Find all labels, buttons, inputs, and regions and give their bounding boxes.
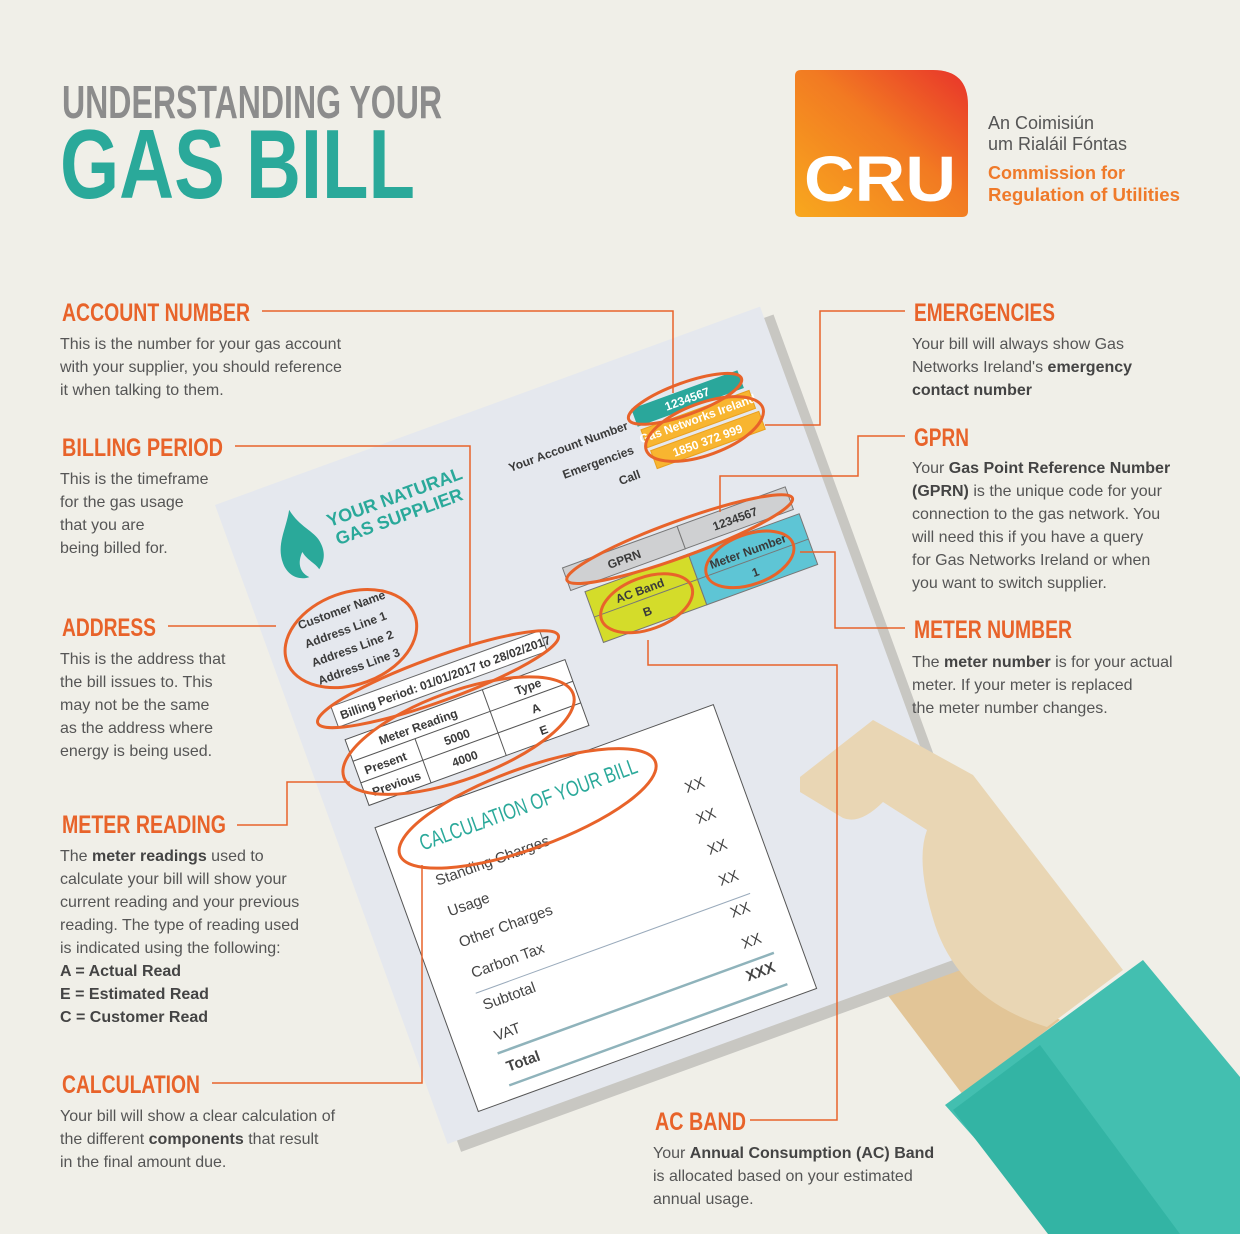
panel: GPRN: GPRN	[914, 424, 969, 452]
panel: AC band: is allocated based on your estimated	[653, 1168, 913, 1185]
logo: CRU: An Coimisiún	[988, 113, 1094, 133]
panel: address: energy is being used.	[60, 743, 212, 760]
panel: billing period: BILLING PERIOD	[62, 434, 223, 462]
connectors	[168, 311, 905, 1120]
panel: GPRN: for Gas Networks Ireland or when	[912, 552, 1150, 569]
panel: calculation: Your bill will show a clear calculation of	[60, 1108, 336, 1125]
panel: billing period: This is the timeframe	[60, 471, 209, 488]
panel: address: as the address where	[60, 720, 213, 737]
panel: calculation: CALCULATION	[62, 1071, 200, 1099]
calculation box: VAT	[492, 1020, 523, 1045]
meter reading table: Previous	[370, 768, 423, 799]
calculation box: XX	[739, 930, 764, 953]
calculation box: XXX	[744, 959, 778, 985]
meter reading table	[329, 651, 592, 819]
logo: CRU: CRU	[804, 143, 956, 215]
sleeve	[945, 960, 1240, 1234]
panel: address	[60, 614, 226, 760]
panel: meter number: The meter number is for your actual	[912, 654, 1173, 671]
title: UNDERSTANDING YOUR	[62, 76, 442, 128]
account & emergencies block: 1234567	[663, 384, 712, 414]
title: GAS BILL	[60, 109, 415, 219]
billing period box	[310, 615, 566, 744]
meter reading table: Present	[363, 749, 409, 777]
panel: GPRN: connection to the gas network. You	[912, 506, 1160, 523]
panel: address: may not be the same	[60, 697, 210, 714]
panel: meter number: METER NUMBER	[914, 616, 1072, 644]
panel: meter reading: C = Customer Read	[60, 1009, 208, 1026]
account & emergencies block: Your Account Number	[507, 418, 630, 475]
panel: account number	[59, 299, 342, 399]
calculation box: XX	[728, 899, 753, 922]
customer address: Address Line 2	[310, 627, 396, 670]
panel: meter reading: current reading and your previous	[60, 894, 299, 911]
customer address: Customer Name	[296, 588, 388, 632]
panel: billing period	[60, 434, 223, 557]
panel: billing period: for the gas usage	[60, 494, 184, 511]
panel: GPRN: you want to switch supplier.	[912, 575, 1107, 592]
hand: palm and thumb	[800, 720, 1123, 1027]
calculation box: Carbon Tax	[469, 940, 547, 982]
calculation box: Standing Charges	[433, 833, 552, 890]
panel: AC band	[653, 1108, 934, 1208]
calculation box: Other Charges	[457, 902, 555, 951]
account & emergencies block: Call	[617, 467, 642, 488]
meter reading table: A	[529, 700, 543, 717]
panel: GPRN	[911, 424, 1170, 592]
panel: address: ADDRESS	[62, 614, 156, 642]
panel: meter reading: A = Actual Read	[60, 963, 181, 980]
panel: GPRN: will need this if you have a query	[911, 529, 1143, 546]
GPRN / AC band / meter number block: 1234567	[711, 504, 760, 534]
meter reading table: Type	[513, 676, 544, 698]
panel: address: This is the address that	[60, 651, 226, 668]
account & emergencies block: Gas Networks Ireland	[638, 391, 758, 446]
billing period box: Billing Period: 01/01/2017 to 28/02/2017	[338, 633, 553, 722]
logo: CRU	[795, 70, 1180, 217]
bill paper	[215, 303, 1006, 1155]
supplier name: YOUR NATURAL	[324, 463, 465, 531]
panel: meter reading: is indicated using the following:	[60, 940, 281, 957]
title	[60, 76, 442, 219]
account & emergencies block	[502, 360, 772, 522]
meter reading table: Meter Reading	[377, 706, 459, 748]
panel: GPRN: (GPRN) is the unique code for your	[912, 483, 1162, 500]
panel: GPRN: Your Gas Point Reference Number	[912, 460, 1170, 477]
meter reading table: 4000	[450, 748, 480, 770]
panel: AC band: annual usage.	[653, 1191, 754, 1208]
panel: emergencies: Your bill will always show Gas	[912, 336, 1124, 353]
calculation box: XX	[705, 836, 730, 859]
hand wrist (under paper)	[880, 962, 1060, 1095]
panel: AC band: AC BAND	[655, 1108, 746, 1136]
panel: calculation: the different components that result	[60, 1131, 318, 1148]
account & emergencies block: 1850 372 999	[671, 421, 745, 460]
panel: meter reading: The meter readings used to	[60, 848, 264, 865]
panel: account number: with your supplier, you should reference	[59, 359, 342, 376]
GPRN / AC band / meter number block: AC Band	[614, 576, 666, 606]
panel: meter reading: METER READING	[62, 811, 226, 839]
logo: CRU: Commission for	[988, 163, 1125, 183]
calculation box: XX	[694, 805, 718, 828]
meter reading table: E	[538, 722, 550, 738]
panel: meter reading: E = Estimated Read	[60, 986, 209, 1003]
panel: emergencies: EMERGENCIES	[914, 299, 1055, 327]
panel: meter reading: calculate your bill will show your	[60, 871, 287, 888]
panel: meter number	[912, 616, 1173, 717]
meter reading table: 5000	[442, 726, 472, 748]
GPRN / AC band / meter number block: B	[641, 603, 654, 620]
panel: meter number: the meter number changes.	[912, 700, 1108, 717]
panel: account number: ACCOUNT NUMBER	[62, 299, 250, 327]
customer address: Address Line 1	[303, 608, 389, 651]
panel: emergencies	[912, 299, 1132, 399]
panel: meter reading	[60, 811, 299, 1026]
panel: meter number: meter. If your meter is replaced	[912, 677, 1133, 694]
supplier name: GAS SUPPLIER	[333, 484, 466, 549]
logo: CRU: Regulation of Utilities	[988, 185, 1180, 205]
calculation box: Total	[504, 1048, 543, 1076]
GPRN / AC band / meter number block	[561, 481, 819, 651]
customer address	[271, 572, 431, 705]
customer address: Address Line 3	[316, 645, 402, 688]
calculation box: Subtotal	[481, 979, 538, 1014]
panel: emergencies: Networks Ireland's emergency	[912, 359, 1132, 376]
panel: account number: This is the number for your gas account	[60, 336, 342, 353]
panel: AC band: Your Annual Consumption (AC) Band	[653, 1145, 934, 1162]
panel: address: the bill issues to. This	[60, 674, 213, 691]
GPRN / AC band / meter number block: 1	[750, 564, 761, 580]
panel: account number: it when talking to them.	[60, 382, 224, 399]
calculation box	[373, 699, 817, 1112]
GPRN / AC band / meter number block: GPRN	[606, 547, 643, 572]
panel: billing period: that you are	[60, 517, 145, 534]
panel: meter reading: reading. The type of reading used	[60, 917, 299, 934]
logo: CRU: um Rialáil Fóntas	[988, 134, 1127, 154]
panel: emergencies: contact number	[912, 382, 1032, 399]
panel: billing period: being billed for.	[60, 540, 168, 557]
panel: calculation: in the final amount due.	[60, 1154, 226, 1171]
account & emergencies block: Emergencies	[561, 443, 636, 482]
calculation box: XX	[682, 774, 707, 797]
GPRN / AC band / meter number block: Meter Number	[708, 531, 789, 572]
calculation box: CALCULATION OF YOUR BILL	[416, 753, 641, 855]
icon: flame	[267, 504, 330, 584]
panel: calculation	[60, 1071, 336, 1171]
calculation box: XX	[716, 867, 741, 890]
calculation box: Usage	[445, 889, 492, 920]
